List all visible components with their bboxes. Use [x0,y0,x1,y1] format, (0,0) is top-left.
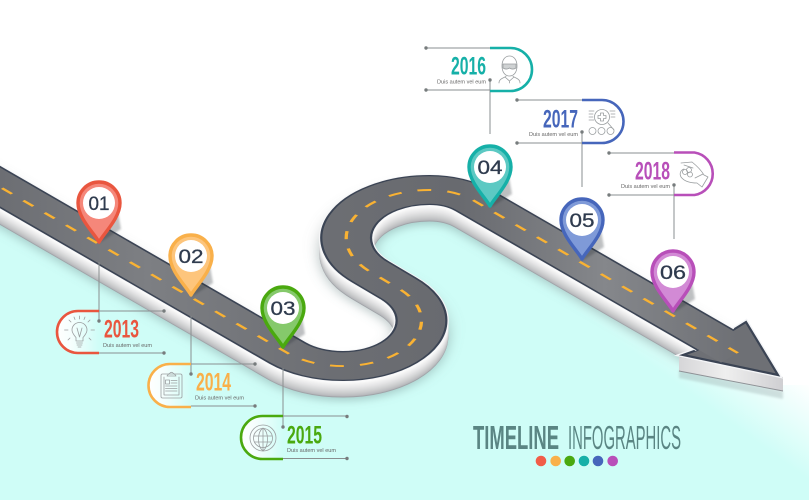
callout 2013 [57,262,166,355]
icon: person with goggles [499,56,520,83]
arrow head side wall [679,357,783,399]
road surface [0,167,738,366]
pin 06: 06 [660,263,686,284]
pin 04: 04 [478,158,503,179]
callout 2018: Duis autem vel eum [621,184,670,190]
road side wall [0,168,715,382]
callout 2016: 2016 [451,52,486,80]
callout 2013: Duis autem vel eum [103,343,152,349]
pin 03 [262,287,304,347]
pin 04 [469,146,511,206]
pin 01: 01 [88,194,110,215]
icon: globe with gear [250,425,276,451]
arrow head surface [683,322,778,375]
callout 2018 [607,151,713,239]
callout 2014: 2014 [196,368,231,396]
road soft shadow [0,174,715,386]
pin 03: 03 [271,299,295,320]
pin 05: 05 [570,211,594,232]
colour dots [536,456,618,466]
icon: clipboard [161,372,182,398]
callout 2018: 2018 [635,158,670,186]
icon: light bulb [64,316,94,347]
callout 2016 [424,46,532,134]
pin 05 [561,199,603,259]
pin 02: 02 [179,247,203,268]
pin 02 [170,235,212,295]
callout 2014 [148,316,257,408]
icon: magnifier with medical cross [589,110,615,134]
road centre dashes [0,167,738,366]
pin shadows [99,177,695,348]
callout 2015 [241,368,349,460]
icon: hand holding pills [680,162,708,187]
callout 2015: Duis autem vel eum [287,448,336,454]
callout 2015: 2015 [287,422,322,450]
callout 2016: Duis autem vel eum [437,80,486,86]
callout 2017 [515,98,624,187]
pin 01 [78,182,120,242]
pin 06 [652,251,694,311]
callout 2017: 2017 [543,106,578,134]
callout 2013: 2013 [104,316,139,344]
callout 2014: Duis autem vel eum [195,396,244,402]
title: TIMELINE [473,419,559,456]
callout 2017: Duis autem vel eum [529,132,578,138]
